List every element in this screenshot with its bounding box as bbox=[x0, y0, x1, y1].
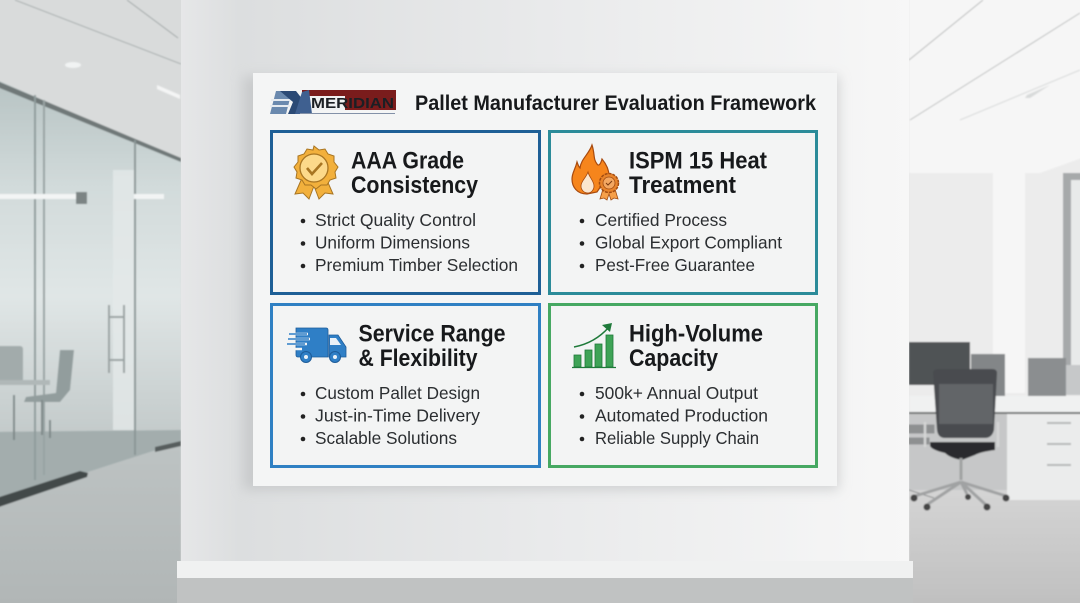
bullet list: Certified Process bbox=[595, 210, 727, 230]
panel: Service Range & Flexibility bbox=[272, 304, 540, 466]
heading: AAA Grade bbox=[351, 148, 464, 174]
bullet list bbox=[580, 383, 768, 448]
panel: AAA Grade Consistency bbox=[272, 132, 540, 294]
heading bbox=[351, 148, 479, 199]
logo: Meridian: MERIDIAN bbox=[311, 96, 394, 112]
bullet list: 500k+ Annual Output bbox=[595, 383, 758, 403]
heading bbox=[629, 320, 763, 372]
bullet list: Just-in-Time Delivery bbox=[315, 406, 480, 426]
sign panel bbox=[243, 73, 839, 490]
icon: growth bar chart bbox=[572, 323, 616, 368]
bullet list bbox=[580, 210, 782, 275]
icon: award rosette bbox=[294, 146, 338, 199]
heading: High-Volume bbox=[629, 320, 763, 348]
background: right open office bbox=[909, 0, 1080, 603]
heading: Consistency bbox=[351, 172, 479, 199]
icon: flame with seal bbox=[572, 145, 618, 200]
panel: High-Volume Capacity bbox=[550, 304, 816, 466]
bullet list bbox=[301, 383, 480, 448]
heading: Capacity bbox=[629, 345, 719, 372]
bullet list: Pest-Free Guarantee bbox=[595, 255, 755, 275]
heading bbox=[629, 148, 767, 199]
bullet list: Custom Pallet Design bbox=[315, 383, 480, 403]
bullet list: Scalable Solutions bbox=[315, 428, 457, 448]
heading bbox=[358, 320, 506, 372]
bullet list: Strict Quality Control bbox=[315, 210, 476, 230]
background: wall column bbox=[177, 0, 913, 603]
bullet list bbox=[301, 210, 518, 275]
heading: Treatment bbox=[629, 172, 736, 199]
title: Pallet Manufacturer Evaluation Framework bbox=[415, 92, 816, 115]
bullet list: Automated Production bbox=[595, 406, 768, 426]
heading: Service Range bbox=[358, 320, 506, 348]
icon: delivery truck bbox=[287, 328, 346, 362]
heading: ISPM 15 Heat bbox=[629, 148, 767, 174]
bullet list: Premium Timber Selection bbox=[315, 255, 518, 275]
bullet list: Global Export Compliant bbox=[595, 232, 782, 252]
heading: & Flexibility bbox=[358, 345, 478, 372]
bullet list: Uniform Dimensions bbox=[315, 232, 470, 252]
background: left glass office bbox=[0, 0, 182, 603]
panel: ISPM 15 Heat Treatment bbox=[550, 132, 816, 294]
bullet list: Reliable Supply Chain bbox=[595, 428, 759, 448]
logo: Meridian bbox=[270, 90, 396, 114]
